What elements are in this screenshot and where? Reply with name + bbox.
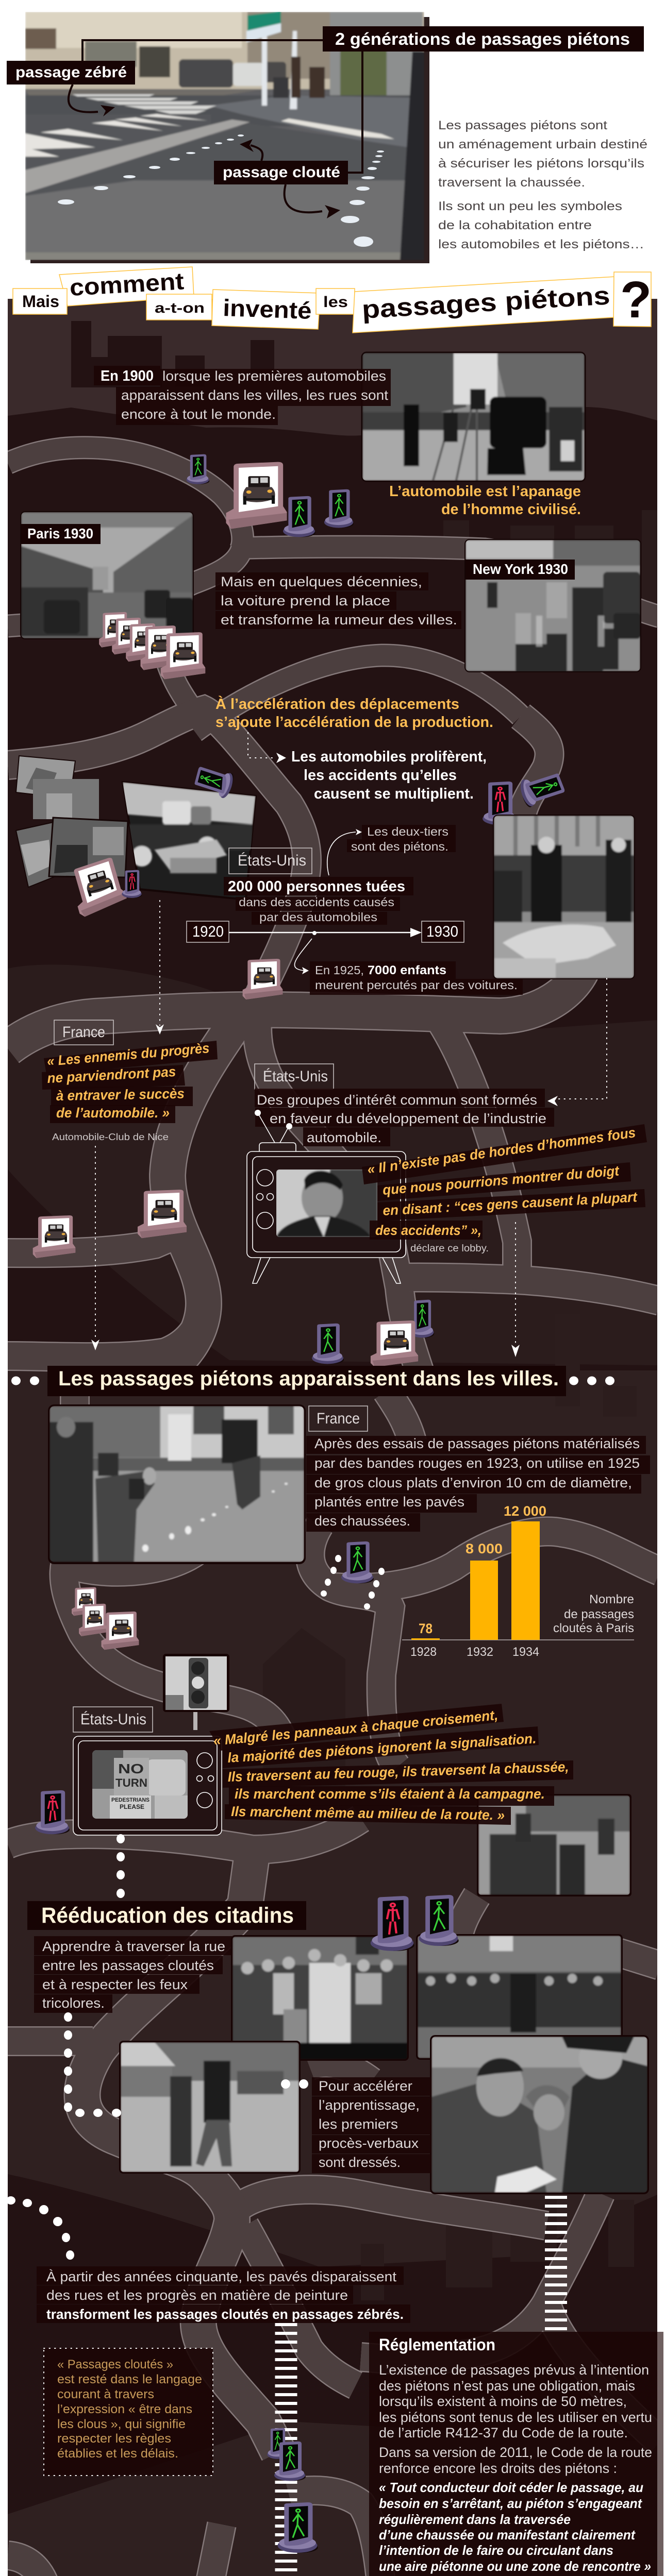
note: En 1925, 7000 enfants: En 1925,	[315, 963, 364, 977]
box: Passages cloutés note: « Passages cloutés »	[57, 2358, 173, 2371]
dotted arrow to heading	[511, 1223, 520, 1357]
panel: Réglementation: L’existence de passages prévus à l’intention	[379, 2362, 649, 2378]
icon: vintage car sign	[226, 462, 287, 529]
icon: green fallen pedestrian light	[192, 763, 236, 800]
text: Mais en quelques décennies: la voiture prend la place	[221, 593, 390, 608]
quote: Automobile-Club de Nice	[42, 1040, 218, 1142]
photo: Paris 1930	[21, 512, 193, 638]
icon: car sign	[371, 1320, 418, 1367]
main title banner: ?	[620, 271, 652, 329]
box: Passages cloutés note: respecter les règles	[57, 2432, 171, 2446]
intro text: Les passages piétons sont	[438, 118, 607, 132]
text: Pour accélérer: procès-verbaux	[319, 2136, 419, 2151]
icon: green pedestrian light	[312, 1324, 344, 1364]
quote: malgré les panneaux: Ils marchent même au milieu de la route. »	[231, 1804, 505, 1823]
label: passage clouté with arrows: passage clouté	[223, 164, 340, 181]
connector lines from the title	[82, 40, 362, 173]
stat: 200 000 personnes tuées: 200 000 personnes tuées	[228, 878, 405, 895]
text: En 1900: En 1900	[101, 368, 154, 384]
text: Pour accélérer: Pour accélérer	[319, 2078, 412, 2094]
heading: Rééducation des citadins: Rééducation des citadins	[41, 1903, 294, 1928]
text: Pour accélérer	[281, 2077, 431, 2173]
stat: 200 000 personnes tuées: par des automobiles	[259, 910, 377, 924]
television with no-turn sign photo: NO	[118, 1761, 144, 1776]
top photo: crossing with studs and zebra	[25, 11, 429, 263]
quote: lobby: « Il n’existe pas de hordes d’hommes fous	[367, 1125, 637, 1177]
bar chart: nombre de passages cloutés à Paris: 8 000	[466, 1541, 503, 1556]
quote: lobby: des accidents” »,	[375, 1223, 481, 1238]
main title banner: inventé	[223, 294, 312, 324]
text: Des groupes d'intérêt commun: Des groupes d’intérêt commun sont formés	[257, 1092, 537, 1108]
bar chart: nombre de passages cloutés à Paris	[402, 1503, 634, 1659]
label: passage zébré with arrow	[7, 61, 135, 116]
panel: Réglementation: une aire piétonne ou une zone de rencontre »	[379, 2558, 651, 2574]
icon: green pedestrian light	[274, 2442, 306, 2481]
dotted arrow to proliferation text	[248, 733, 286, 763]
icon: red pedestrian light	[122, 870, 142, 898]
photo: crowd in the street	[477, 1794, 631, 1896]
label: États-Unis	[73, 1707, 153, 1732]
note: En 1925, 7000 enfants: 7000 enfants	[368, 963, 446, 977]
panel: Réglementation: Dans sa version de 2011, le Code de la route	[379, 2445, 652, 2460]
icon: green fallen pedestrian light	[518, 768, 567, 808]
text: À partir des années cinquante: transforment les passages cloutés en passages zébrés.	[46, 2307, 404, 2322]
box: Passages cloutés note: est resté dans le langage	[57, 2372, 202, 2386]
note: Les deux-tiers: Les deux-tiers	[367, 825, 448, 838]
box: Passages cloutés note: établies et les délais.	[57, 2447, 178, 2461]
text: Les automobiles prolifèrent: causent se multiplient.	[314, 786, 474, 802]
intro text: un aménagement urbain destiné	[438, 138, 647, 151]
text: Apprendre à traverser: entre les passages cloutés	[42, 1958, 214, 1973]
quote: Automobile-Club de Nice: ne parviendront pas	[47, 1064, 176, 1086]
text: Après des essais: de gros clous plats d’environ 10 cm de diamètre,	[314, 1475, 632, 1490]
television with no-turn sign photo: TURN	[115, 1776, 147, 1789]
quote: malgré les panneaux: la majorité des piétons ignorent la signalisation.	[227, 1731, 537, 1766]
box: Passages cloutés note	[44, 2348, 213, 2476]
text: Apprendre à traverser: et à respecter les feux	[42, 1977, 188, 1992]
bar chart: nombre de passages cloutés à Paris: 1928	[410, 1645, 437, 1659]
bar chart: nombre de passages cloutés à Paris: 1932	[467, 1645, 493, 1659]
text: En 1900	[94, 366, 391, 425]
television with no-turn sign photo: PEDESTRIANS	[111, 1797, 149, 1803]
text: À partir des années cinquante	[37, 2266, 410, 2323]
note: Les deux-tiers	[327, 825, 456, 875]
title: 2 générations de passages piétons: 2 générations de passages piétons	[335, 29, 630, 48]
text: En 1900: lorsque les premières automobiles	[162, 368, 386, 384]
text: Après des essais	[306, 1436, 650, 1532]
box: Passages cloutés note: courant à travers	[57, 2387, 154, 2401]
text: Les automobiles prolifèrent: Les automobiles prolifèrent,	[291, 749, 487, 765]
text: Après des essais: par des bandes rouges en 1923, on utilise en 1925	[314, 1455, 640, 1471]
heading: Les passages piétons apparaissent: Les passages piétons apparaissent dans les villes.	[58, 1367, 559, 1390]
label: New York 1930: New York 1930	[473, 561, 568, 577]
photo: workers planting studs	[48, 1404, 306, 1564]
label: France: France	[62, 1024, 105, 1041]
caption: L'automobile est l'apanage	[389, 483, 581, 518]
intro text: les automobiles et les piétons…	[438, 238, 644, 251]
quote: lobby: en disant : “ces gens causent la plupart	[383, 1189, 638, 1218]
icon: car sign	[33, 1215, 75, 1258]
icon: green pedestrian light	[324, 489, 354, 528]
title: 2 générations de passages piétons	[323, 26, 644, 52]
text: Pour accélérer: l’apprentissage,	[319, 2097, 420, 2113]
photo: street in 1900	[362, 353, 585, 481]
icon: red pedestrian light	[35, 1790, 70, 1834]
television with lobby portrait	[247, 1110, 406, 1283]
note: Les deux-tiers: sont des piétons.	[351, 840, 448, 853]
label: États-Unis	[255, 1064, 334, 1089]
photo: New York 1930	[466, 540, 640, 672]
text: Les automobiles prolifèrent: les accidents qu’elles	[304, 767, 457, 784]
photo: children at the crossing	[231, 1935, 409, 2061]
panel: Réglementation: des piétons n’est pas une obligation, mais	[379, 2378, 635, 2394]
label: États-Unis: États-Unis	[263, 1068, 328, 1085]
text: Mais en quelques décennies	[215, 572, 461, 629]
timeline 1920 to 1930	[187, 921, 464, 942]
television with no-turn sign photo	[73, 1736, 222, 1835]
intro text: de la cohabitation entre	[438, 218, 592, 232]
intro text: à sécuriser les piétons lorsqu’ils	[438, 157, 644, 171]
intro text: Ils sont un peu les symboles	[438, 199, 622, 213]
icon: car sign	[243, 959, 282, 999]
bar chart: nombre de passages cloutés à Paris: cloutés à Paris	[553, 1621, 634, 1635]
text: Des groupes d'intérêt commun: en faveur du développement de l’industrie	[270, 1111, 546, 1126]
label: Paris 1930: Paris 1930	[27, 526, 93, 541]
quote: Automobile-Club de Nice: « Les ennemis du progrès	[46, 1040, 210, 1069]
main title banner: comment	[69, 267, 185, 301]
icon: red pedestrian light	[371, 1896, 414, 1951]
icon: green pedestrian light	[419, 1895, 459, 1946]
text: Après des essais: Après des essais de passages piétons matérialisés	[314, 1436, 640, 1451]
quote: lobby: que nous pourrions montrer du doigt	[382, 1163, 620, 1198]
text: À partir des années cinquante: À partir des années cinquante, les pavés disparaissent	[46, 2269, 397, 2284]
icon: green pedestrian light	[267, 2428, 288, 2459]
quote: malgré les panneaux: Ils traversent au feu rouge, ils traversent la chaussée,	[227, 1759, 569, 1785]
text: Des groupes d'intérêt commun: automobile.	[307, 1130, 381, 1145]
text: Apprendre à traverser	[34, 1936, 232, 2013]
intro text	[438, 118, 647, 251]
photo: police at accident scene	[494, 816, 634, 978]
text: acceleration: s’ajoute l’accélération de la production.	[215, 714, 493, 731]
panel: Réglementation: renforce encore les droits des piétons :	[379, 2461, 617, 2476]
icon: tilted car sign	[67, 856, 128, 918]
dotted stud curve	[6, 2196, 74, 2260]
text: Pour accélérer: les premiers	[319, 2116, 398, 2132]
icon: green light with stud circle	[321, 1541, 385, 1609]
photo stack: car accidents	[16, 756, 256, 900]
television with no-turn sign photo: PLEASE	[120, 1803, 144, 1810]
text: Les automobiles prolifèrent	[291, 749, 487, 802]
panel: Réglementation: de l’article R412-37 du Code de la route.	[379, 2425, 628, 2441]
icon: green pedestrian light	[186, 454, 209, 484]
timeline 1920 to 1930: 1930	[426, 923, 458, 940]
dotted arrow left	[91, 1146, 99, 1350]
quote: malgré les panneaux: « Malgré les panneaux à chaque croisement,	[213, 1707, 498, 1749]
bar chart: nombre de passages cloutés à Paris: 78	[419, 1621, 433, 1636]
panel: Réglementation: l’intention de le faire ou circulant dans	[379, 2543, 613, 2558]
zebra strip: central vertical	[275, 2323, 297, 2576]
text: acceleration: À l’accélération des déplacements	[215, 695, 459, 713]
bar chart: nombre de passages cloutés à Paris: 12 000	[504, 1503, 546, 1519]
dotted stud path to photo	[64, 2012, 121, 2117]
text: En 1900: encore à tout le monde.	[121, 406, 276, 422]
bar chart: nombre de passages cloutés à Paris: 1934	[512, 1645, 539, 1659]
main title banner: a-t-on	[155, 300, 205, 316]
stat: 200 000 personnes tuées	[224, 877, 413, 925]
note: En 1925, 7000 enfants: meurent percutés par des voitures.	[315, 978, 518, 992]
text: Mais en quelques décennies: Mais en quelques décennies,	[221, 574, 422, 589]
text: Après des essais: des chaussées.	[314, 1513, 410, 1529]
panel: Réglementation: Réglementation	[379, 2335, 495, 2354]
photo: officer writing a ticket	[430, 2035, 649, 2194]
quote: malgré les panneaux	[209, 1704, 573, 1825]
label: France	[309, 1406, 368, 1431]
caption: L'automobile est l'apanage: L’automobile est l’apanage	[389, 483, 581, 500]
quote: malgré les panneaux: ils marchent comme s’ils étaient à la campagne.	[235, 1786, 545, 1802]
text: Apprendre à traverser: Apprendre à traverser la rue	[42, 1939, 225, 1954]
text: En 1900: apparaissent dans les villes, les rues sont	[121, 387, 389, 403]
dotted stud path	[117, 1834, 125, 1898]
text: Après des essais: plantés entre les pavés	[314, 1494, 464, 1510]
panel: Réglementation: d’une chaussée ou manifestant clairement	[379, 2527, 636, 2543]
text: Des groupes d'intérêt commun	[255, 1089, 554, 1146]
main title banner: les	[323, 294, 348, 311]
box: Passages cloutés note: l’expression « être dans	[57, 2402, 192, 2416]
quote: lobby: déclare ce lobby.	[410, 1243, 489, 1254]
dotted arrow to États-Unis lobby text	[547, 978, 607, 1106]
note: En 1925, 7000 enfants	[294, 939, 523, 995]
dotted arrow to France	[156, 901, 164, 1035]
quote: Automobile-Club de Nice: de l’automobile. »	[56, 1105, 170, 1121]
text: Pour accélérer: sont dressés.	[319, 2155, 401, 2170]
text: acceleration	[215, 695, 493, 731]
panel: Réglementation: besoin en s’arrêtant, au piéton s’engageant	[379, 2496, 642, 2511]
label: États-Unis: États-Unis	[238, 852, 306, 869]
intro text: traversent la chaussée.	[438, 176, 585, 190]
bar chart: nombre de passages cloutés à Paris: Nombre	[589, 1592, 634, 1606]
panel: Réglementation: « Tout conducteur doit céder le passage, au	[379, 2480, 643, 2495]
timeline 1920 to 1930: 1920	[192, 923, 224, 940]
text: Mais en quelques décennies: et transforme la rumeur des villes.	[221, 612, 457, 628]
bar chart: nombre de passages cloutés à Paris: de passages	[564, 1607, 634, 1621]
photo: traffic light	[163, 1654, 229, 1730]
label: passage zébré with arrow: passage zébré	[15, 64, 127, 81]
icon: car sign	[138, 1190, 187, 1238]
panel: Réglementation	[369, 2332, 663, 2576]
quote: Automobile-Club de Nice: à entraver le succès	[56, 1086, 185, 1104]
icon row: five car signs	[99, 612, 205, 679]
stat: 200 000 personnes tuées: dans des accidents causés	[239, 895, 394, 909]
label: passage clouté with arrows	[214, 139, 348, 218]
heading: Les passages piétons apparaissent	[11, 1366, 614, 1396]
panel: Réglementation: lorsqu’ils existent à moins de 50 mètres,	[379, 2394, 627, 2409]
text: Apprendre à traverser: tricolores.	[42, 1995, 105, 2011]
photo: policeman speaks to a man	[119, 2041, 301, 2174]
icon: green pedestrian light	[283, 496, 315, 537]
photo: crowd and policeman	[416, 1934, 623, 2060]
label: France	[54, 1020, 113, 1045]
main title banner	[13, 267, 652, 333]
label: France: France	[317, 1410, 360, 1427]
zebra strip: upper vertical	[545, 2196, 567, 2330]
icons: three car signs	[72, 1587, 139, 1650]
icon: green pedestrian light	[278, 2502, 318, 2553]
panel: Réglementation: les piétons sont tenus de les utiliser en vertu	[379, 2410, 652, 2425]
text: À partir des années cinquante: des rues et les progrès en matière de peinture	[46, 2287, 348, 2303]
main title banner: passages piétons	[361, 281, 611, 324]
main title banner: Mais	[22, 292, 59, 311]
label: États-Unis	[229, 848, 312, 874]
panel: Réglementation: régulièrement dans la traversée	[379, 2512, 571, 2527]
caption: L'automobile est l'apanage: de l’homme civilisé.	[441, 501, 581, 518]
icon: green pedestrian light	[410, 1300, 434, 1337]
quote: lobby	[362, 1124, 647, 1254]
quote: Automobile-Club de Nice: Automobile-Club de Nice	[52, 1132, 169, 1142]
box: Passages cloutés note: les clous », qui signifie	[57, 2417, 186, 2431]
label: États-Unis: États-Unis	[80, 1711, 146, 1728]
icon: red pedestrian light	[483, 782, 517, 825]
